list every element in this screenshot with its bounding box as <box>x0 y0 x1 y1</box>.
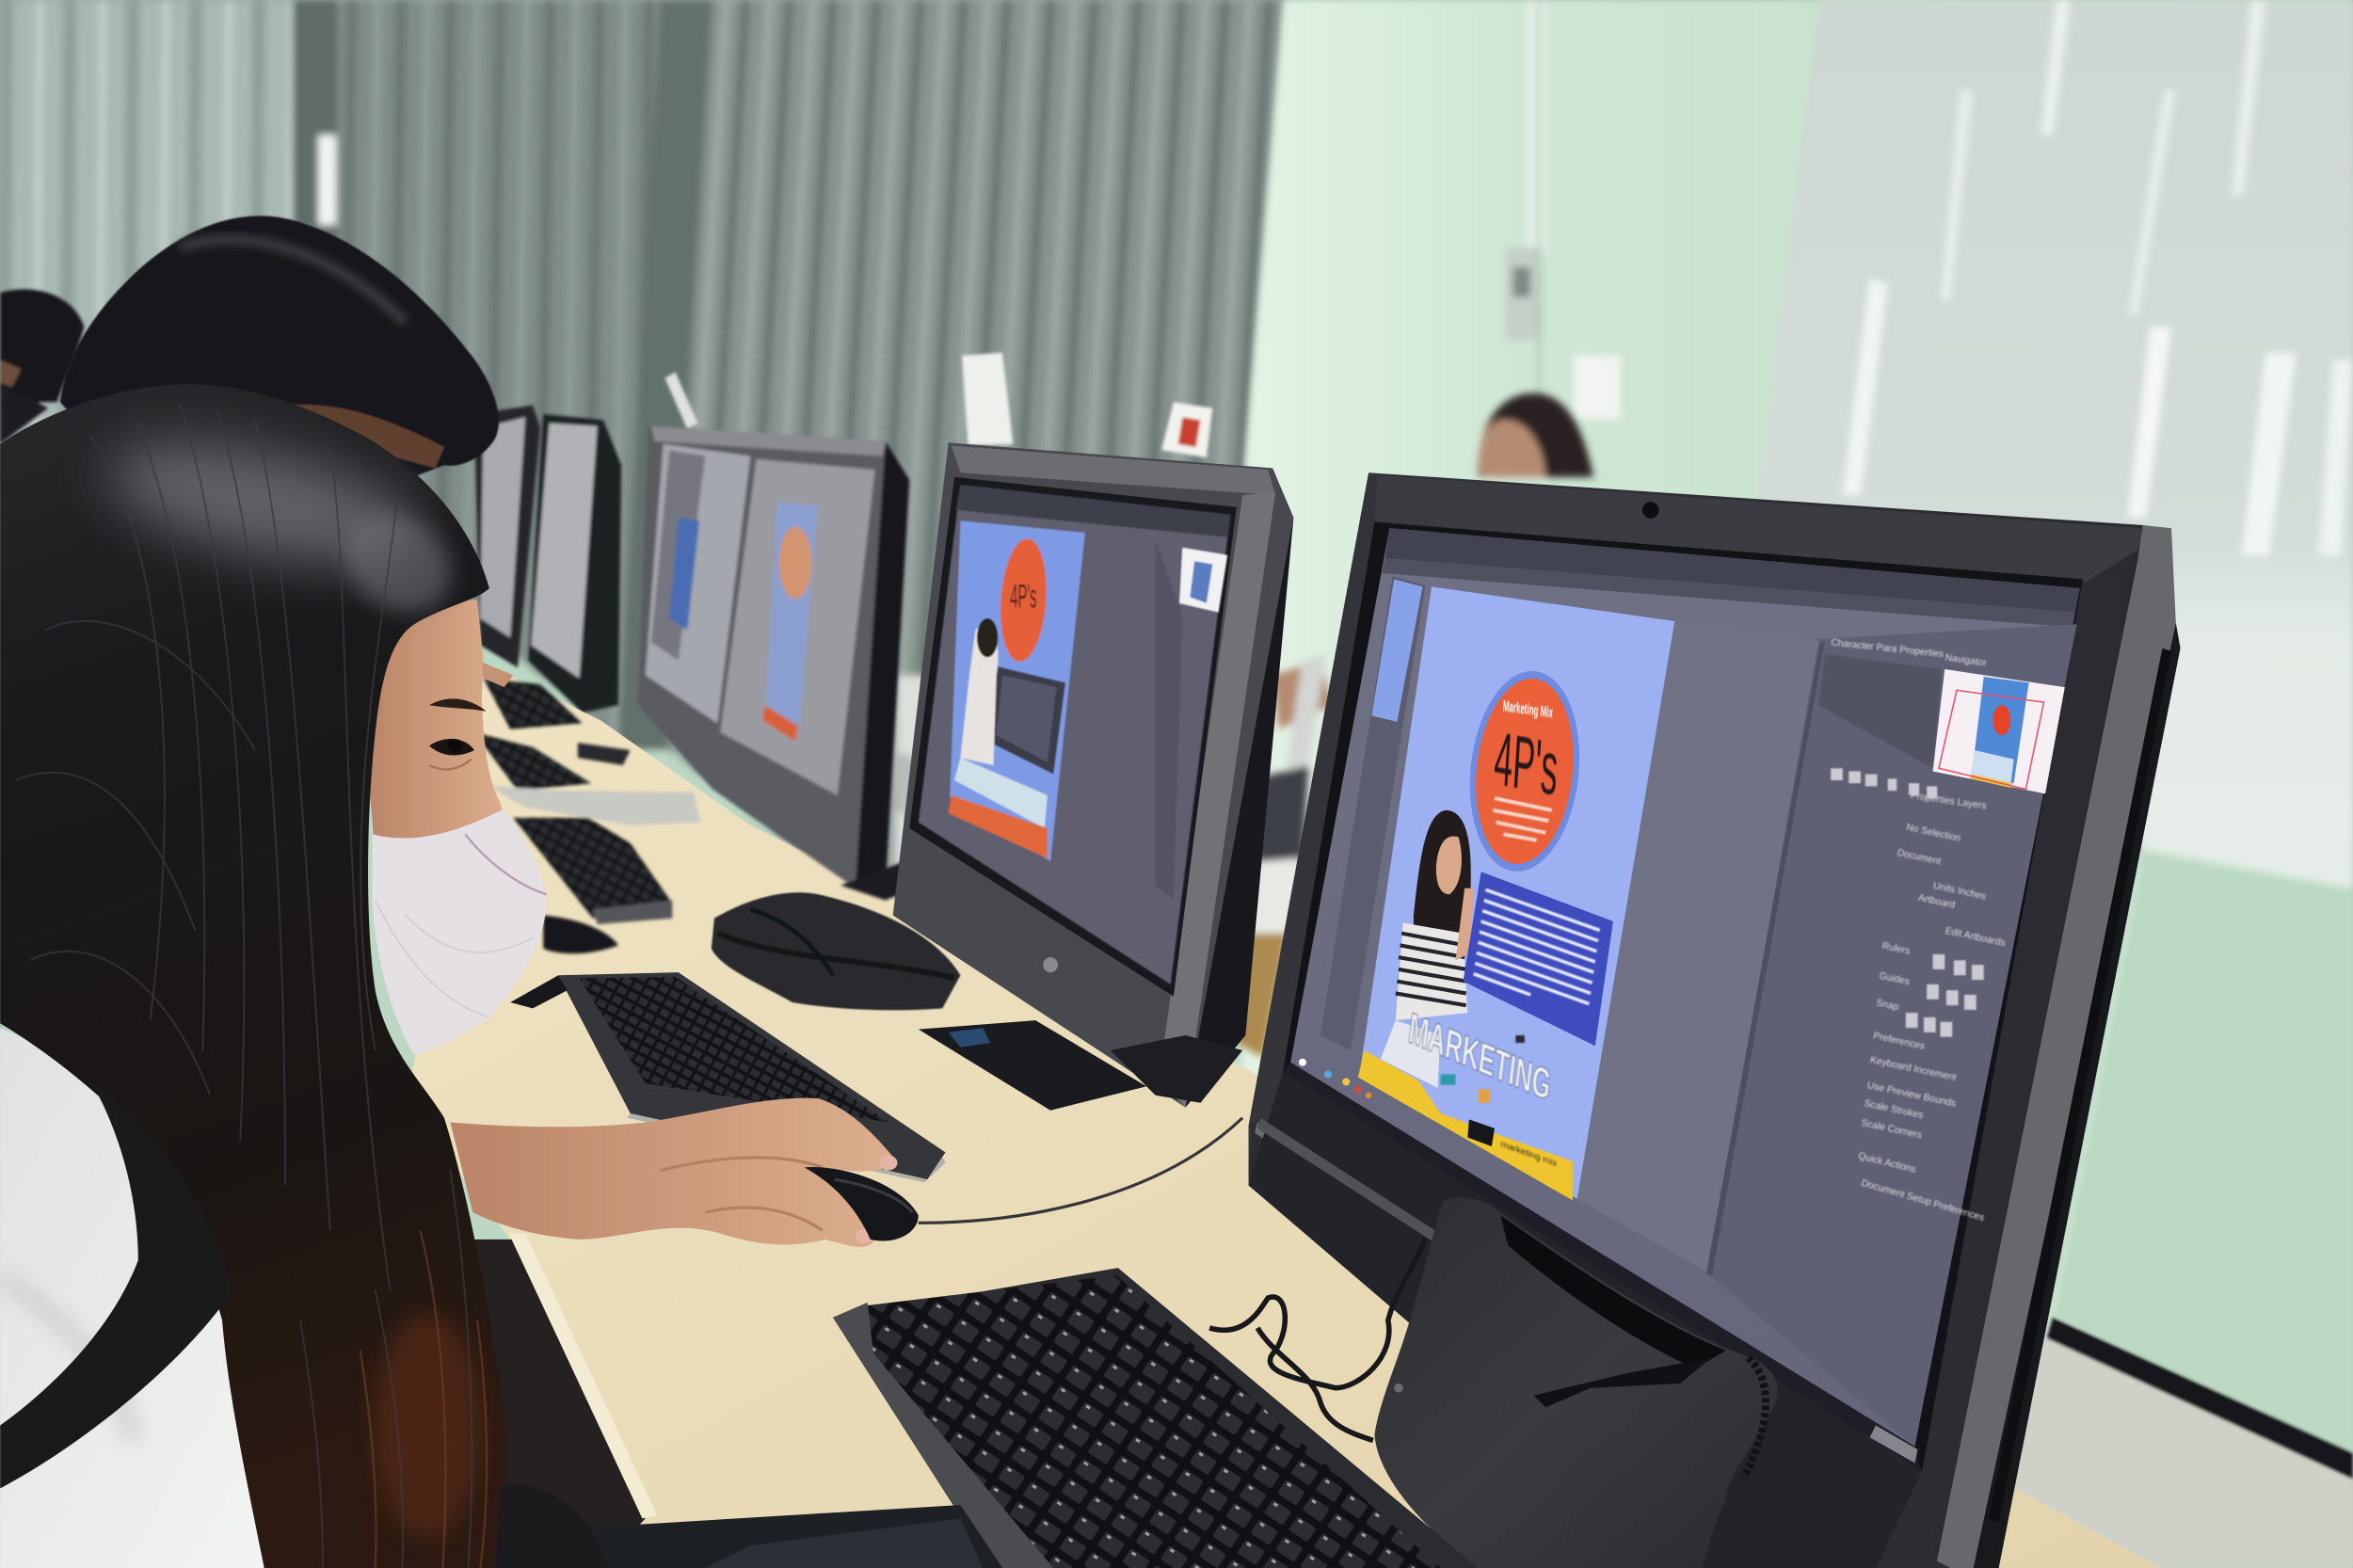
properties panel controls: Character Para Properties <box>1831 638 1945 660</box>
person in the background <box>1478 393 1593 477</box>
monitor front bezel <box>1249 472 2143 1568</box>
objects behind the row of monitors: arm, white keyboard, desk and box <box>894 654 1333 1058</box>
background: mint green wall <box>1238 0 2353 1568</box>
small paper notes on monitors <box>664 353 1212 457</box>
properties panel controls: No Selection <box>1905 823 1961 844</box>
poster circle <box>1461 665 1589 877</box>
lower wall, skirting and floor <box>1995 856 2353 1568</box>
monitor chin <box>1249 1071 1922 1568</box>
far student's arm edge behind mask <box>477 660 513 687</box>
properties panel controls: Navigator <box>1945 653 1988 669</box>
monitor silver side strip <box>1936 525 2176 1568</box>
woman's long hair <box>0 384 506 1568</box>
properties panel controls: Preferences <box>1872 1031 1926 1052</box>
second monitor with poster <box>893 442 1293 1111</box>
far monitors row <box>474 405 621 712</box>
properties panel controls: Use Preview Bounds <box>1866 1080 1957 1110</box>
properties panel controls: Keyboard Increment <box>1869 1055 1958 1083</box>
hair sheen <box>98 420 427 585</box>
properties panel controls: Rulers <box>1881 941 1911 957</box>
poster woman <box>1381 810 1474 1088</box>
poster text box <box>1464 872 1613 1046</box>
poster circle: 4P's <box>1492 717 1561 812</box>
double monitors mid-row <box>638 426 923 901</box>
chair below desk <box>495 1484 608 1568</box>
hair strand across shirt <box>0 1080 232 1489</box>
inner screen frame <box>1283 522 2083 1470</box>
properties panel controls: Document <box>1897 848 1942 868</box>
thumbnail page <box>1371 579 1422 722</box>
navigator thumbnail <box>1933 669 2065 793</box>
webcam <box>1642 502 1659 519</box>
eye <box>429 739 474 756</box>
main monitor <box>1249 472 2181 1568</box>
hair strands <box>15 405 472 1568</box>
poster circle: Marketing Mix <box>1502 697 1553 721</box>
cloth pouch on main monitor <box>1374 1197 1778 1568</box>
woman's shirt <box>0 1028 308 1568</box>
properties panel controls: Units Inches <box>1932 881 1987 903</box>
properties panel controls: Edit Artboards <box>1945 926 2007 949</box>
properties panel controls: Artboard <box>1917 893 1956 911</box>
poster yellow footer: marketing mix <box>1500 1139 1558 1169</box>
front keyboard <box>833 1268 1478 1568</box>
properties panel controls: Scale Strokes <box>1864 1098 1924 1121</box>
properties panel controls: Preferences <box>1932 1199 1985 1224</box>
properties panel controls: Guides <box>1878 971 1911 987</box>
man in front: dark hair and neck <box>60 216 499 480</box>
tangled black cord <box>1209 1238 1426 1440</box>
properties panel controls: Document Setup <box>1860 1178 1933 1208</box>
poster yellow footer <box>1358 1050 1573 1200</box>
computer mouse <box>805 1167 919 1241</box>
poster canvas <box>1359 586 1674 1199</box>
second monitor with poster: 4P's <box>1010 578 1036 615</box>
monitor back edge <box>1974 623 2181 1568</box>
mid keyboard <box>510 972 945 1182</box>
properties panel controls: Properties Layers <box>1910 791 1987 811</box>
cable on desk <box>919 1118 1242 1223</box>
properties panel controls: Scale Corners <box>1860 1118 1923 1141</box>
properties panel controls: Quick Actions <box>1857 1151 1917 1176</box>
white face mask <box>372 808 546 1055</box>
woman's arm and hand on mouse <box>450 1098 897 1247</box>
eyebrow <box>429 698 487 712</box>
poster marketing headline <box>1406 1003 1553 1110</box>
desk <box>406 660 2161 1568</box>
properties panel controls: Snap <box>1875 998 1899 1013</box>
vent slots <box>1988 648 2171 1523</box>
far keyboards and power strip <box>474 679 701 953</box>
task bar <box>1283 1059 1921 1470</box>
whiteboard with sunlight stripes <box>1759 0 2353 888</box>
poster marketing headline: MARKETING <box>1406 1003 1553 1110</box>
woman's face <box>366 600 507 856</box>
black bag on mid desk <box>712 892 960 1010</box>
properties panel controls <box>1818 638 2007 1224</box>
tablet on desk <box>588 1505 1002 1568</box>
application screen <box>1283 528 2080 1470</box>
far student: dark hair <box>0 289 84 444</box>
